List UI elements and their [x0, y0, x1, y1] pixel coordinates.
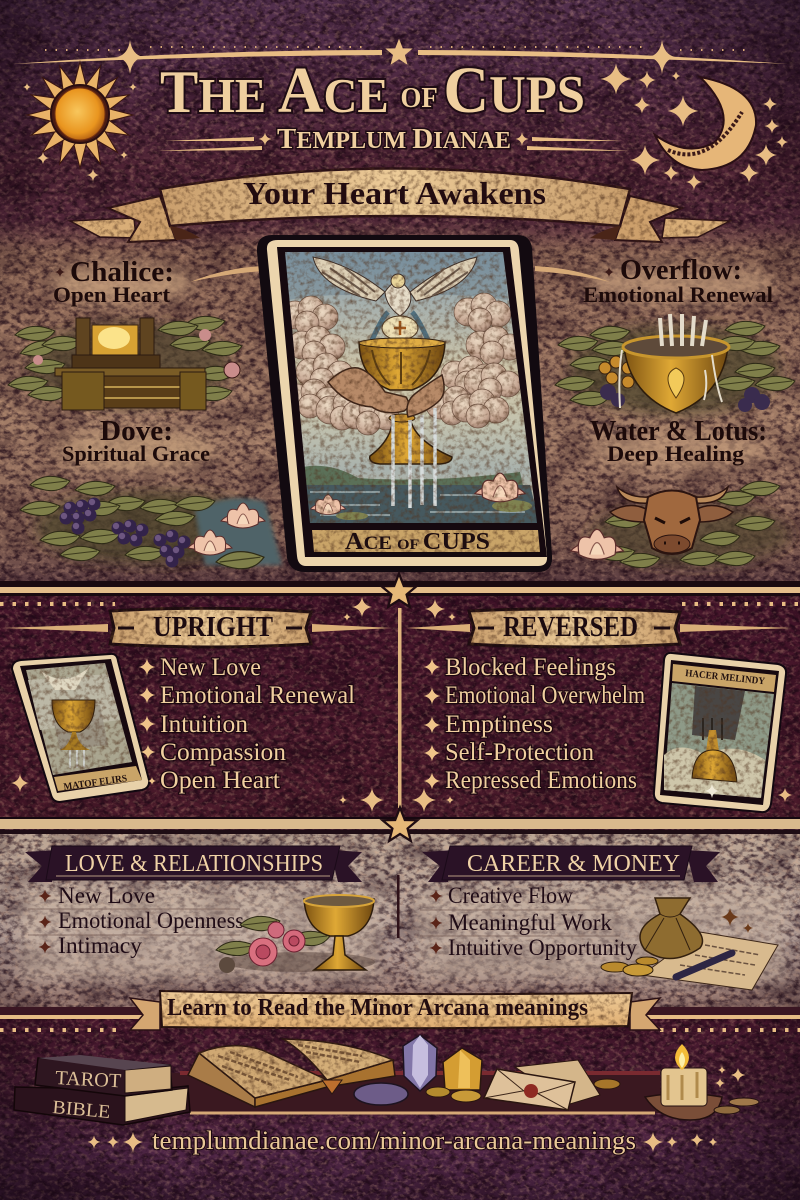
reversed list: Repressed Emotions	[445, 767, 637, 794]
banner text: Your Heart Awakens	[243, 175, 546, 211]
background: love career section	[0, 834, 800, 1009]
upright list: New Love	[160, 654, 261, 681]
label: Water and Lotus	[590, 415, 767, 466]
wafer	[382, 316, 418, 340]
divider with star	[0, 574, 800, 607]
lotus on card	[310, 473, 532, 520]
distant trees and water	[303, 466, 523, 486]
label: Chalice: Open Heart	[53, 282, 171, 307]
label: Overflow	[583, 254, 773, 307]
banner: Upright	[110, 608, 311, 647]
main card: Ace of Cups	[257, 235, 552, 572]
open book	[188, 1039, 395, 1107]
illustration: goblet and roses	[216, 895, 375, 973]
love list: Emotional Openness	[58, 908, 244, 933]
reversed list: Self-Protection	[445, 739, 594, 766]
illustration: bull head and foliage	[571, 481, 780, 568]
header	[12, 39, 788, 190]
clouds left	[281, 296, 399, 435]
background: upright reversed section	[0, 585, 800, 820]
title: UPS	[489, 66, 585, 124]
connector lines beside card	[190, 266, 610, 282]
panel: right symbols	[555, 254, 795, 568]
clouds right	[426, 293, 523, 428]
reversed list: Blocked Feelings	[445, 654, 616, 681]
panel: Career and Money	[420, 846, 778, 990]
banner: Reversed	[469, 609, 680, 647]
upright list: Open Heart	[160, 767, 280, 794]
icon: sun	[23, 62, 137, 181]
card label: ACE OF CUPS	[345, 529, 490, 555]
envelope and letter	[484, 1060, 620, 1110]
banner: Reversed: REVERSED	[503, 611, 638, 643]
label: Overflow: Overflow:	[620, 254, 742, 286]
panel: Love and Relationships	[25, 846, 375, 973]
love list: New Love	[58, 883, 155, 908]
shelf with objects	[14, 1035, 759, 1125]
card frame	[257, 235, 552, 572]
upright list: Compassion	[160, 739, 287, 766]
label: Chalice: Chalice:	[70, 256, 174, 288]
label: Dove: Spiritual Grace	[62, 441, 210, 466]
reversed list: Emptiness	[445, 711, 553, 738]
panel: left symbols	[8, 256, 282, 569]
hand	[328, 368, 444, 417]
subtitle	[157, 123, 630, 155]
label: Water and Lotus: Water & Lotus:	[590, 415, 767, 447]
panel: Reversed	[406, 599, 792, 812]
dove	[313, 257, 477, 340]
title: THE ACE	[160, 54, 392, 127]
ribbon: Love and Relationships: LOVE & RELATIONSHIPS	[65, 851, 323, 877]
center vertical divider	[398, 608, 402, 808]
upright list: Emotional Renewal	[160, 682, 355, 709]
career list: Meaningful Work	[448, 910, 612, 935]
ribbon: Career and Money	[422, 846, 720, 882]
small upright card: MATOF ELIRS	[63, 773, 128, 793]
upright list	[138, 654, 355, 794]
books: Tarot and Bible: BIBLE	[52, 1097, 111, 1123]
ribbon: Career and Money: CAREER & MONEY	[467, 851, 680, 877]
subtitle: TEMPLUM DIANAE	[277, 123, 511, 155]
banner text: Learn to Read the Minor Arcana meanings	[167, 995, 588, 1021]
icon: crescent moon and stars	[600, 64, 788, 190]
card artwork	[280, 250, 542, 525]
background: upper section	[0, 0, 800, 585]
illustration: grapes, leaves and lotus	[20, 476, 282, 569]
footer URL: templumdianae.com/minor-arcana-meanings	[152, 1126, 636, 1155]
soft glow and foliage tones behind side panels	[20, 263, 790, 980]
banner: Upright: UPRIGHT	[153, 611, 273, 643]
ribbon: Love and Relationships	[25, 846, 362, 882]
illustration: overflowing cauldron	[555, 314, 795, 413]
ribbon banner: Your Heart Awakens	[70, 168, 730, 242]
panel: Upright	[0, 597, 800, 812]
lower banner: Learn to Read	[0, 991, 800, 1030]
illustration: altar with foliage	[8, 316, 242, 410]
water streams	[393, 408, 435, 508]
small reversed card	[654, 653, 786, 812]
small upright card	[12, 654, 149, 802]
second divider with star	[0, 808, 800, 841]
candle	[645, 1044, 759, 1120]
career list: Creative Flow	[448, 883, 573, 908]
gemstones	[354, 1035, 482, 1105]
love list	[28, 883, 244, 958]
label: Overflow: Emotional Renewal	[583, 282, 773, 307]
illustration: coin pouch, letter and pen	[601, 898, 778, 990]
card label	[312, 529, 540, 555]
title: C	[443, 54, 489, 127]
section divider line	[397, 875, 400, 938]
reversed list: Emotional Overwhelm	[445, 682, 645, 709]
reversed list	[424, 654, 645, 794]
title: OF	[400, 83, 443, 114]
chalice	[359, 338, 452, 464]
shelf	[170, 1073, 660, 1113]
label: Dove	[62, 415, 210, 466]
books: Tarot and Bible: TAROT	[55, 1067, 122, 1092]
label: Dove: Dove:	[100, 415, 173, 447]
career list	[420, 883, 637, 960]
label: Water and Lotus: Deep Healing	[607, 441, 744, 466]
upright list: Intuition	[160, 711, 249, 738]
label: Chalice	[53, 256, 174, 307]
books: Tarot and Bible	[14, 1055, 190, 1125]
top ornamental line	[12, 39, 788, 74]
love list: Intimacy	[58, 933, 143, 958]
background: footer section	[0, 1008, 800, 1200]
small reversed card: HACER MELINDY	[685, 668, 766, 687]
career list: Intuitive Opportunity	[448, 935, 637, 960]
